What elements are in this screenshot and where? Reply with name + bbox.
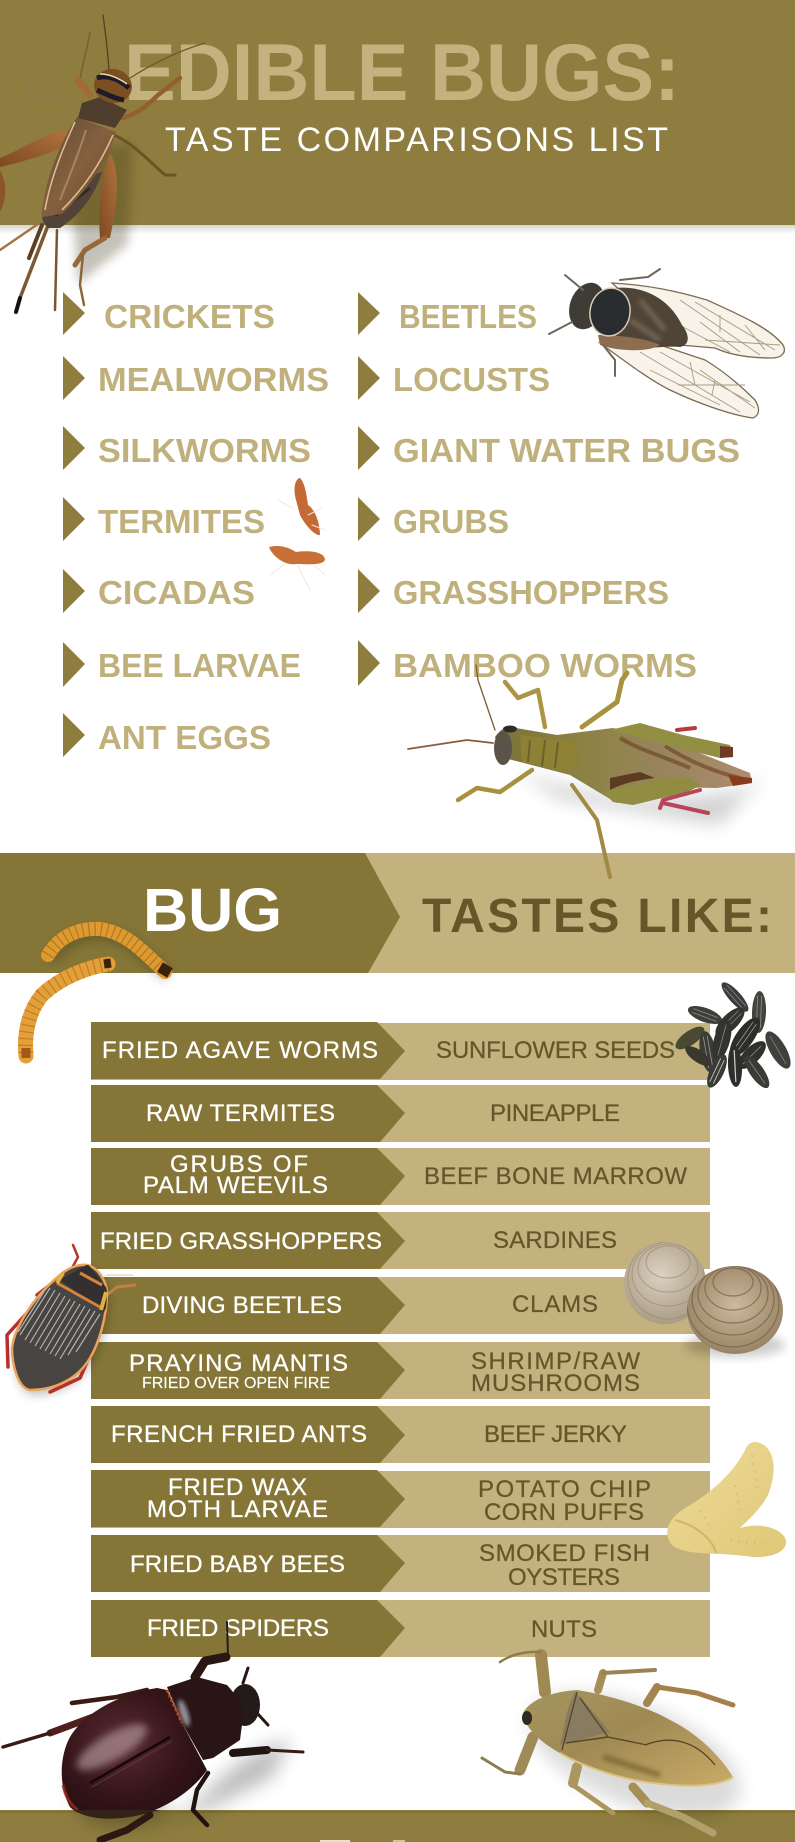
row: french fried ants / beef jerky: FRENCH FRIED ANTS (111, 1421, 367, 1448)
row: fried grasshoppers / sardines: SARDINES (493, 1227, 617, 1254)
row: raw termites / pineapple: PINEAPPLE (490, 1100, 620, 1127)
list item: cicadas: CICADAS (98, 574, 255, 611)
icon: termites (269, 478, 325, 590)
row: fried spiders / nuts: FRIED SPIDERS (147, 1615, 329, 1642)
banner heading: bug: BUG (143, 876, 282, 944)
row: fried spiders / nuts: NUTS (531, 1616, 597, 1643)
footer band (0, 1810, 795, 1842)
list item: crickets: CRICKETS (104, 298, 275, 335)
list item: bamboo worms (358, 640, 697, 686)
row: fried wax moth larvae / potato chip corn puffs: POTATO CHIP (478, 1476, 651, 1503)
list item: termites: TERMITES (98, 503, 265, 540)
row: fried baby bees / smoked fish oysters: FRIED BABY BEES (130, 1551, 345, 1578)
row: grubs of palm weevils / beef bone marrow: PALM WEEVILS (143, 1172, 328, 1199)
row: fried agave worms / sunflower seeds (91, 1022, 710, 1080)
list item: cicadas (63, 569, 255, 613)
row: diving beetles / clams: CLAMS (512, 1291, 598, 1318)
list item: beetles: BEETLES (399, 298, 537, 335)
list item: grubs: GRUBS (393, 503, 509, 540)
row: fried baby bees / smoked fish oysters: SMOKED FISH (479, 1540, 650, 1567)
row: grubs of palm weevils / beef bone marrow (91, 1148, 710, 1205)
row: fried wax moth larvae / potato chip corn puffs (91, 1470, 710, 1528)
banner heading: tastes like: TASTES LIKE: (422, 890, 772, 943)
row: fried baby bees / smoked fish oysters: OYSTERS (508, 1564, 620, 1591)
row: fried grasshoppers / sardines: FRIED GRASSHOPPERS (100, 1228, 382, 1255)
row: diving beetles / clams: DIVING BEETLES (142, 1292, 342, 1319)
icon: clams (624, 1239, 785, 1357)
header band (0, 0, 795, 234)
list item: ant eggs: ANT EGGS (98, 719, 271, 756)
icon: giant water bug (482, 1652, 758, 1842)
list item: bamboo worms: BAMBOO WORMS (393, 647, 697, 684)
row: raw termites / pineapple: RAW TERMITES (146, 1100, 335, 1127)
icon: grasshopper (408, 665, 765, 877)
row: praying mantis / shrimp, raw mushrooms: PRAYING MANTIS (129, 1350, 348, 1377)
list item: beetles (358, 292, 537, 335)
icon: cicada (549, 269, 784, 418)
list item: grubs (358, 497, 509, 541)
icon: diving beetle (7, 1245, 135, 1395)
title: EDIBLE BUGS: (124, 28, 680, 118)
icon: mealworms (26, 929, 170, 1058)
row: raw termites / pineapple (91, 1085, 710, 1142)
row: fried agave worms / sunflower seeds: FRIED AGAVE WORMS (102, 1037, 378, 1064)
row: fried spiders / nuts (91, 1600, 710, 1657)
list item: bee larvae (63, 642, 301, 687)
row: fried agave worms / sunflower seeds: SUNFLOWER SEEDS (436, 1037, 675, 1064)
row: fried grasshoppers / sardines (91, 1212, 710, 1269)
icon: corn puffs (667, 1442, 786, 1557)
row: fried wax moth larvae / potato chip corn puffs: MOTH LARVAE (147, 1496, 328, 1523)
list item: crickets (63, 292, 275, 335)
row: fried wax moth larvae / potato chip corn puffs: CORN PUFFS (484, 1499, 644, 1526)
list item: locusts (358, 356, 550, 400)
row: praying mantis / shrimp, raw mushrooms: FRIED OVER OPEN FIRE (142, 1375, 330, 1392)
row: praying mantis / shrimp, raw mushrooms (91, 1342, 710, 1399)
list item: silkworms: SILKWORMS (98, 432, 311, 469)
row: praying mantis / shrimp, raw mushrooms: SHRIMP/RAW (471, 1348, 640, 1375)
icon: cricket (0, 15, 205, 312)
row: diving beetles / clams (91, 1277, 710, 1334)
list item: locusts: LOCUSTS (393, 361, 550, 398)
list item: termites (63, 497, 265, 541)
list item: grasshoppers: GRASSHOPPERS (393, 574, 669, 611)
row: grubs of palm weevils / beef bone marrow: BEEF BONE MARROW (424, 1163, 687, 1190)
row: grubs of palm weevils / beef bone marrow: GRUBS OF (170, 1151, 308, 1178)
row: fried baby bees / smoked fish oysters (91, 1535, 710, 1592)
bug list (63, 292, 740, 757)
list item: bee larvae: BEE LARVAE (98, 647, 301, 684)
table rows (91, 1022, 710, 1657)
row: praying mantis / shrimp, raw mushrooms: MUSHROOMS (471, 1370, 640, 1397)
row: french fried ants / beef jerky (91, 1406, 710, 1463)
row: fried wax moth larvae / potato chip corn puffs: FRIED WAX (168, 1474, 307, 1501)
list item: ant eggs (63, 713, 271, 757)
row: french fried ants / beef jerky: BEEF JERKY (484, 1421, 627, 1448)
list item: giant water bugs: GIANT WATER BUGS (393, 432, 740, 469)
list item: silkworms (63, 426, 311, 470)
icon: sunflower seeds (672, 979, 795, 1092)
banner: bug / tastes like (0, 853, 795, 973)
subtitle: TASTE COMPARISONS LIST (165, 121, 668, 159)
icon: rhinoceros beetle (3, 1622, 303, 1840)
list item: mealworms: MEALWORMS (98, 361, 329, 398)
